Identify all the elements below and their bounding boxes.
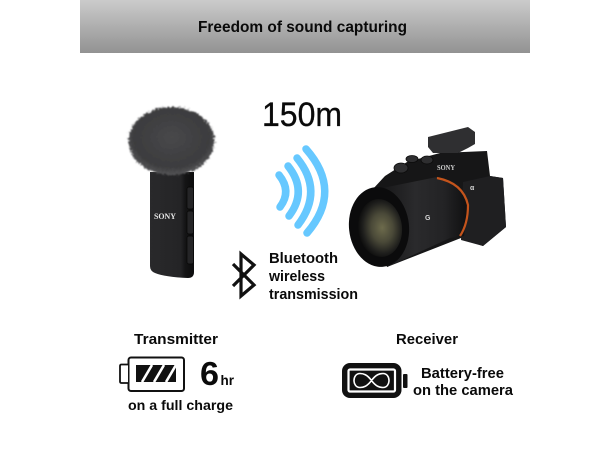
side buttons — [187, 187, 194, 264]
orange lens mount ring — [437, 178, 468, 236]
camera grip — [461, 176, 506, 246]
lens barrel — [372, 177, 468, 267]
battery life value: hr — [220, 372, 235, 388]
receiver heading: Receiver — [396, 331, 458, 348]
bluetooth label: wireless — [268, 269, 325, 285]
title: Freedom of sound capturing — [198, 19, 407, 36]
lens G badge: G — [425, 215, 431, 222]
lens glass — [355, 197, 405, 259]
lens front ring — [345, 184, 413, 270]
receiver caption: Battery-free — [421, 366, 504, 382]
transmitter heading: Transmitter — [134, 331, 218, 348]
receiver unit — [428, 127, 475, 153]
icon: charged battery — [120, 358, 184, 391]
receiver caption: on the camera — [413, 383, 514, 399]
camera body — [372, 151, 506, 267]
bluetooth label: Bluetooth — [269, 251, 338, 267]
fur windscreen — [128, 107, 214, 175]
range value: 150m — [262, 96, 342, 134]
microphone body — [150, 172, 194, 278]
alpha mark: α — [470, 185, 475, 192]
icon: wireless signal arcs — [279, 149, 325, 233]
battery life value: 6 — [200, 355, 219, 392]
transmitter microphone photo — [128, 107, 214, 278]
icon: bluetooth — [233, 254, 254, 296]
SONY logo on camera: SONY — [437, 164, 455, 172]
bluetooth label: transmission — [269, 287, 358, 303]
icon: battery-free infinity — [342, 363, 408, 398]
battery life value — [200, 355, 235, 392]
bluetooth label — [268, 251, 358, 303]
SONY logo on microphone: SONY — [154, 212, 176, 221]
receiver caption — [413, 366, 514, 399]
title banner — [80, 0, 530, 53]
transmitter caption: on a full charge — [128, 397, 233, 413]
dials — [394, 156, 433, 173]
camera photo — [345, 127, 506, 270]
